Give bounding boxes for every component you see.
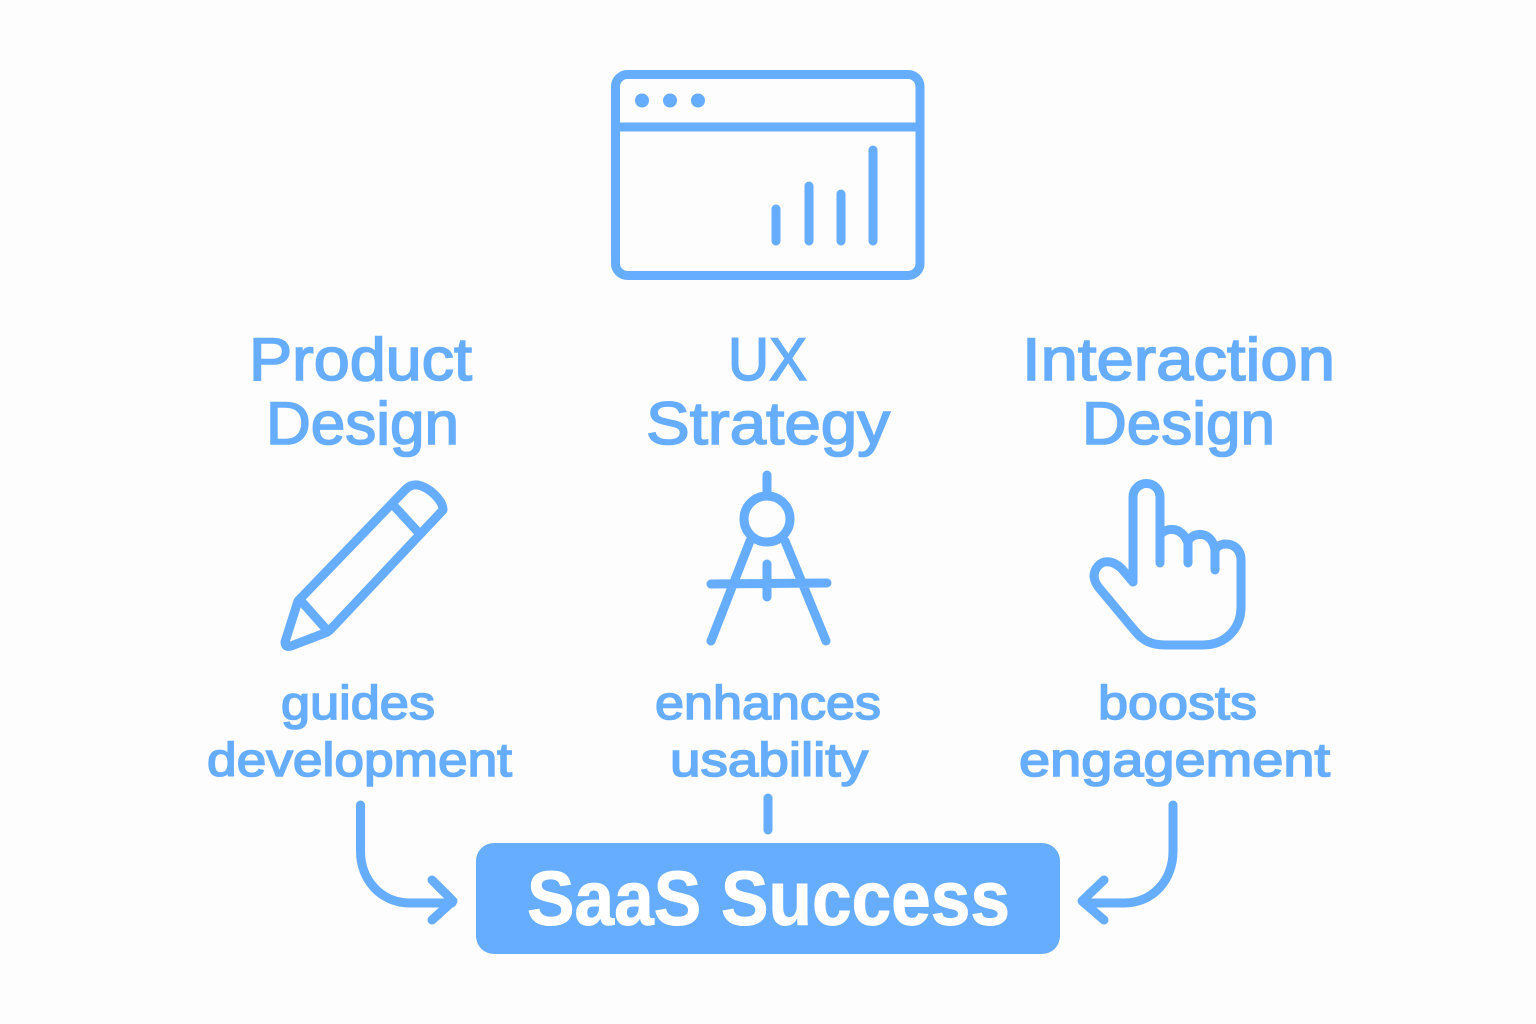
heading: Product Design: Product [249,326,472,393]
connector: UX strategy to SaaS Success [764,798,772,830]
icon: browser window with bar chart [616,74,920,276]
heading: Interaction Design [1022,326,1335,457]
text: enhances usability [655,676,881,786]
text: enhances usability: usability [670,733,869,786]
heading: Interaction Design: Design [1082,390,1275,457]
heading: Product Design: Design [266,390,459,457]
text: guides development: guides [281,676,435,729]
arrow: interaction design to SaaS Success [1082,805,1173,920]
heading: UX Strategy: Strategy [646,390,890,457]
result box: SaaS Success [476,843,1060,954]
heading: UX Strategy [646,326,890,457]
text: boosts engagement: engagement [1019,733,1330,786]
text: guides development: development [207,733,512,786]
heading: UX Strategy: UX [728,326,807,393]
icon: drafting compass [711,475,827,641]
text: guides development [207,676,512,786]
heading: Interaction Design: Interaction [1022,326,1335,393]
heading: Product Design [249,326,472,457]
icon: pencil [285,485,443,646]
text: boosts engagement [1019,676,1330,786]
result box: SaaS Success: SaaS Success [527,856,1010,942]
text: boosts engagement: boosts [1098,676,1257,729]
icon: pointing hand [1094,484,1241,645]
text: enhances usability: enhances [655,676,881,729]
arrow: product design to SaaS Success [360,805,453,920]
